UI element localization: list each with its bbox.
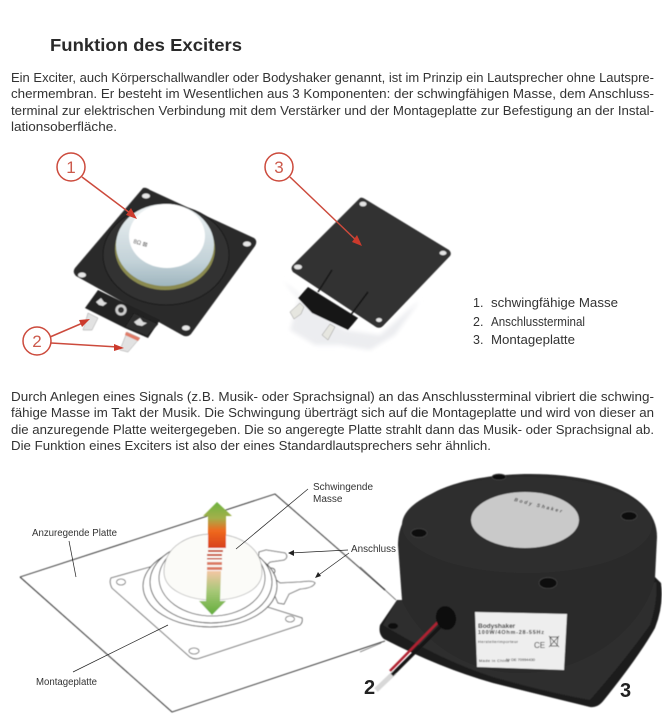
dome marking: 8Ω ⊠	[132, 239, 148, 249]
dome label	[129, 204, 205, 268]
collar	[103, 205, 229, 305]
text block: function description: fähige Masse im Takt der Musik. Die Schwingung überträgt sich auf die Montageplatte und wird von dieser an	[11, 406, 654, 420]
number 3: 3	[620, 680, 631, 702]
terminal raised pad	[125, 313, 158, 336]
top label disc	[471, 492, 579, 548]
dome	[164, 534, 262, 600]
product label	[475, 612, 567, 670]
text block: introduction: terminal zur elektrischen Verbindung mit dem Verstärker und der Montageplatte zur Befestigung an der Instal-	[11, 104, 654, 118]
diagram label: Anschluss	[288, 544, 396, 578]
product label text: Made in China	[479, 658, 510, 663]
plate holes	[78, 194, 251, 330]
callout: marker 2: 2	[32, 332, 42, 351]
cable grommet	[433, 604, 459, 632]
lug red mark	[125, 332, 140, 341]
callout: marker 1	[57, 153, 137, 219]
vibration arrow down	[199, 571, 226, 615]
product label text: CE	[534, 641, 545, 650]
screws	[411, 474, 637, 588]
mounting holes	[116, 568, 294, 654]
legend list: Anschlussterminal	[491, 315, 585, 329]
terminal lugs	[83, 313, 98, 330]
flange	[380, 577, 662, 707]
callout: marker 3: 3	[274, 158, 284, 177]
text block: introduction: lationsoberfläche.	[11, 120, 117, 134]
photo: Bodyshaker	[360, 474, 662, 707]
text block: introduction: Ein Exciter, auch Körperschallwandler oder Bodyshaker genannt, ist im Prinzip ein Lautsprecher ohne Lautspre-	[11, 71, 654, 85]
legend list: schwingfähige Masse	[491, 296, 618, 310]
terminal slots	[318, 270, 368, 316]
diagram: exciter on panel	[20, 494, 385, 712]
top face highlight	[402, 477, 652, 573]
dome rim	[115, 208, 215, 290]
mounting plate outline	[110, 567, 302, 659]
terminal lugs	[290, 303, 304, 319]
photo: exciter rear view	[282, 198, 451, 350]
text block: introduction	[11, 71, 654, 134]
text block: function description: Durch Anlegen eines Signals (z.B. Musik- oder Sprachsignal) an das Anschlussterminal vibriert die schwing-	[11, 390, 654, 404]
product label text: Nr DE 70994430	[506, 657, 536, 662]
dome side	[116, 204, 214, 286]
product label text: Bodyshaker	[478, 623, 516, 630]
vibration arrow bands	[207, 550, 223, 570]
diagram label: Anzuregende Platte	[32, 528, 117, 577]
flange hole	[388, 623, 398, 629]
legend list: 1.	[473, 296, 483, 310]
diagram label: Schwingende Masse: Schwingende	[313, 482, 373, 493]
callout: marker 1: 1	[66, 158, 76, 177]
product label text	[478, 623, 559, 663]
terminal screw details	[115, 304, 127, 316]
collar rings	[143, 545, 277, 627]
terminal block	[298, 287, 358, 330]
text block: introduction: chermembran. Er besteht im Wesentlichen aus 3 Komponenten: der schwingfähigen Masse, dem Anschluss-	[11, 87, 654, 101]
mounting plate	[292, 198, 451, 328]
mounting plate	[74, 188, 256, 336]
product label text: 100W/4Ohm-28-55Hz	[478, 630, 544, 636]
terminal tabs	[258, 550, 315, 604]
diagram label: Anschluss: Anschluss	[351, 544, 396, 555]
diagram label: Montageplatte: Montageplatte	[36, 677, 97, 688]
text block: function description: die anzuregende Platte weitergegeben. Die so angeregte Platte strahlt dann das Musik- oder Sprachsignal ab.	[11, 423, 654, 437]
legend list: 2.	[473, 315, 483, 329]
vibration arrow up	[203, 502, 232, 548]
legend list: 3.	[473, 333, 483, 347]
flange top surface	[383, 582, 656, 700]
panel outline	[20, 494, 385, 712]
cable	[376, 672, 395, 690]
diagram label: Schwingende Masse: Masse	[313, 494, 343, 505]
diagram label: Schwingende Masse	[236, 482, 373, 549]
body	[398, 474, 657, 673]
plate holes	[294, 202, 446, 322]
text block: function description: Die Funktion eines Exciters ist also der eines Standardlautsprechers sehr ähnlich.	[11, 439, 491, 453]
reflection	[282, 280, 420, 350]
callout: marker 2	[23, 319, 124, 355]
photo: exciter front view	[74, 188, 256, 352]
number 2: 2	[364, 677, 375, 699]
text block: function description	[11, 390, 654, 453]
terminal block	[85, 290, 160, 338]
top label text: Body Shaker	[514, 497, 564, 515]
legend list	[473, 296, 618, 347]
diagram label: Anzuregende Platte: Anzuregende Platte	[32, 528, 117, 539]
product label text: Herstellerimporteur	[478, 639, 519, 644]
title: Funktion des Exciters	[50, 35, 242, 55]
legend list: Montageplatte	[491, 333, 575, 347]
callout: marker 3	[265, 153, 362, 246]
diagram label: Montageplatte	[36, 625, 168, 688]
lines to the product	[360, 567, 396, 652]
